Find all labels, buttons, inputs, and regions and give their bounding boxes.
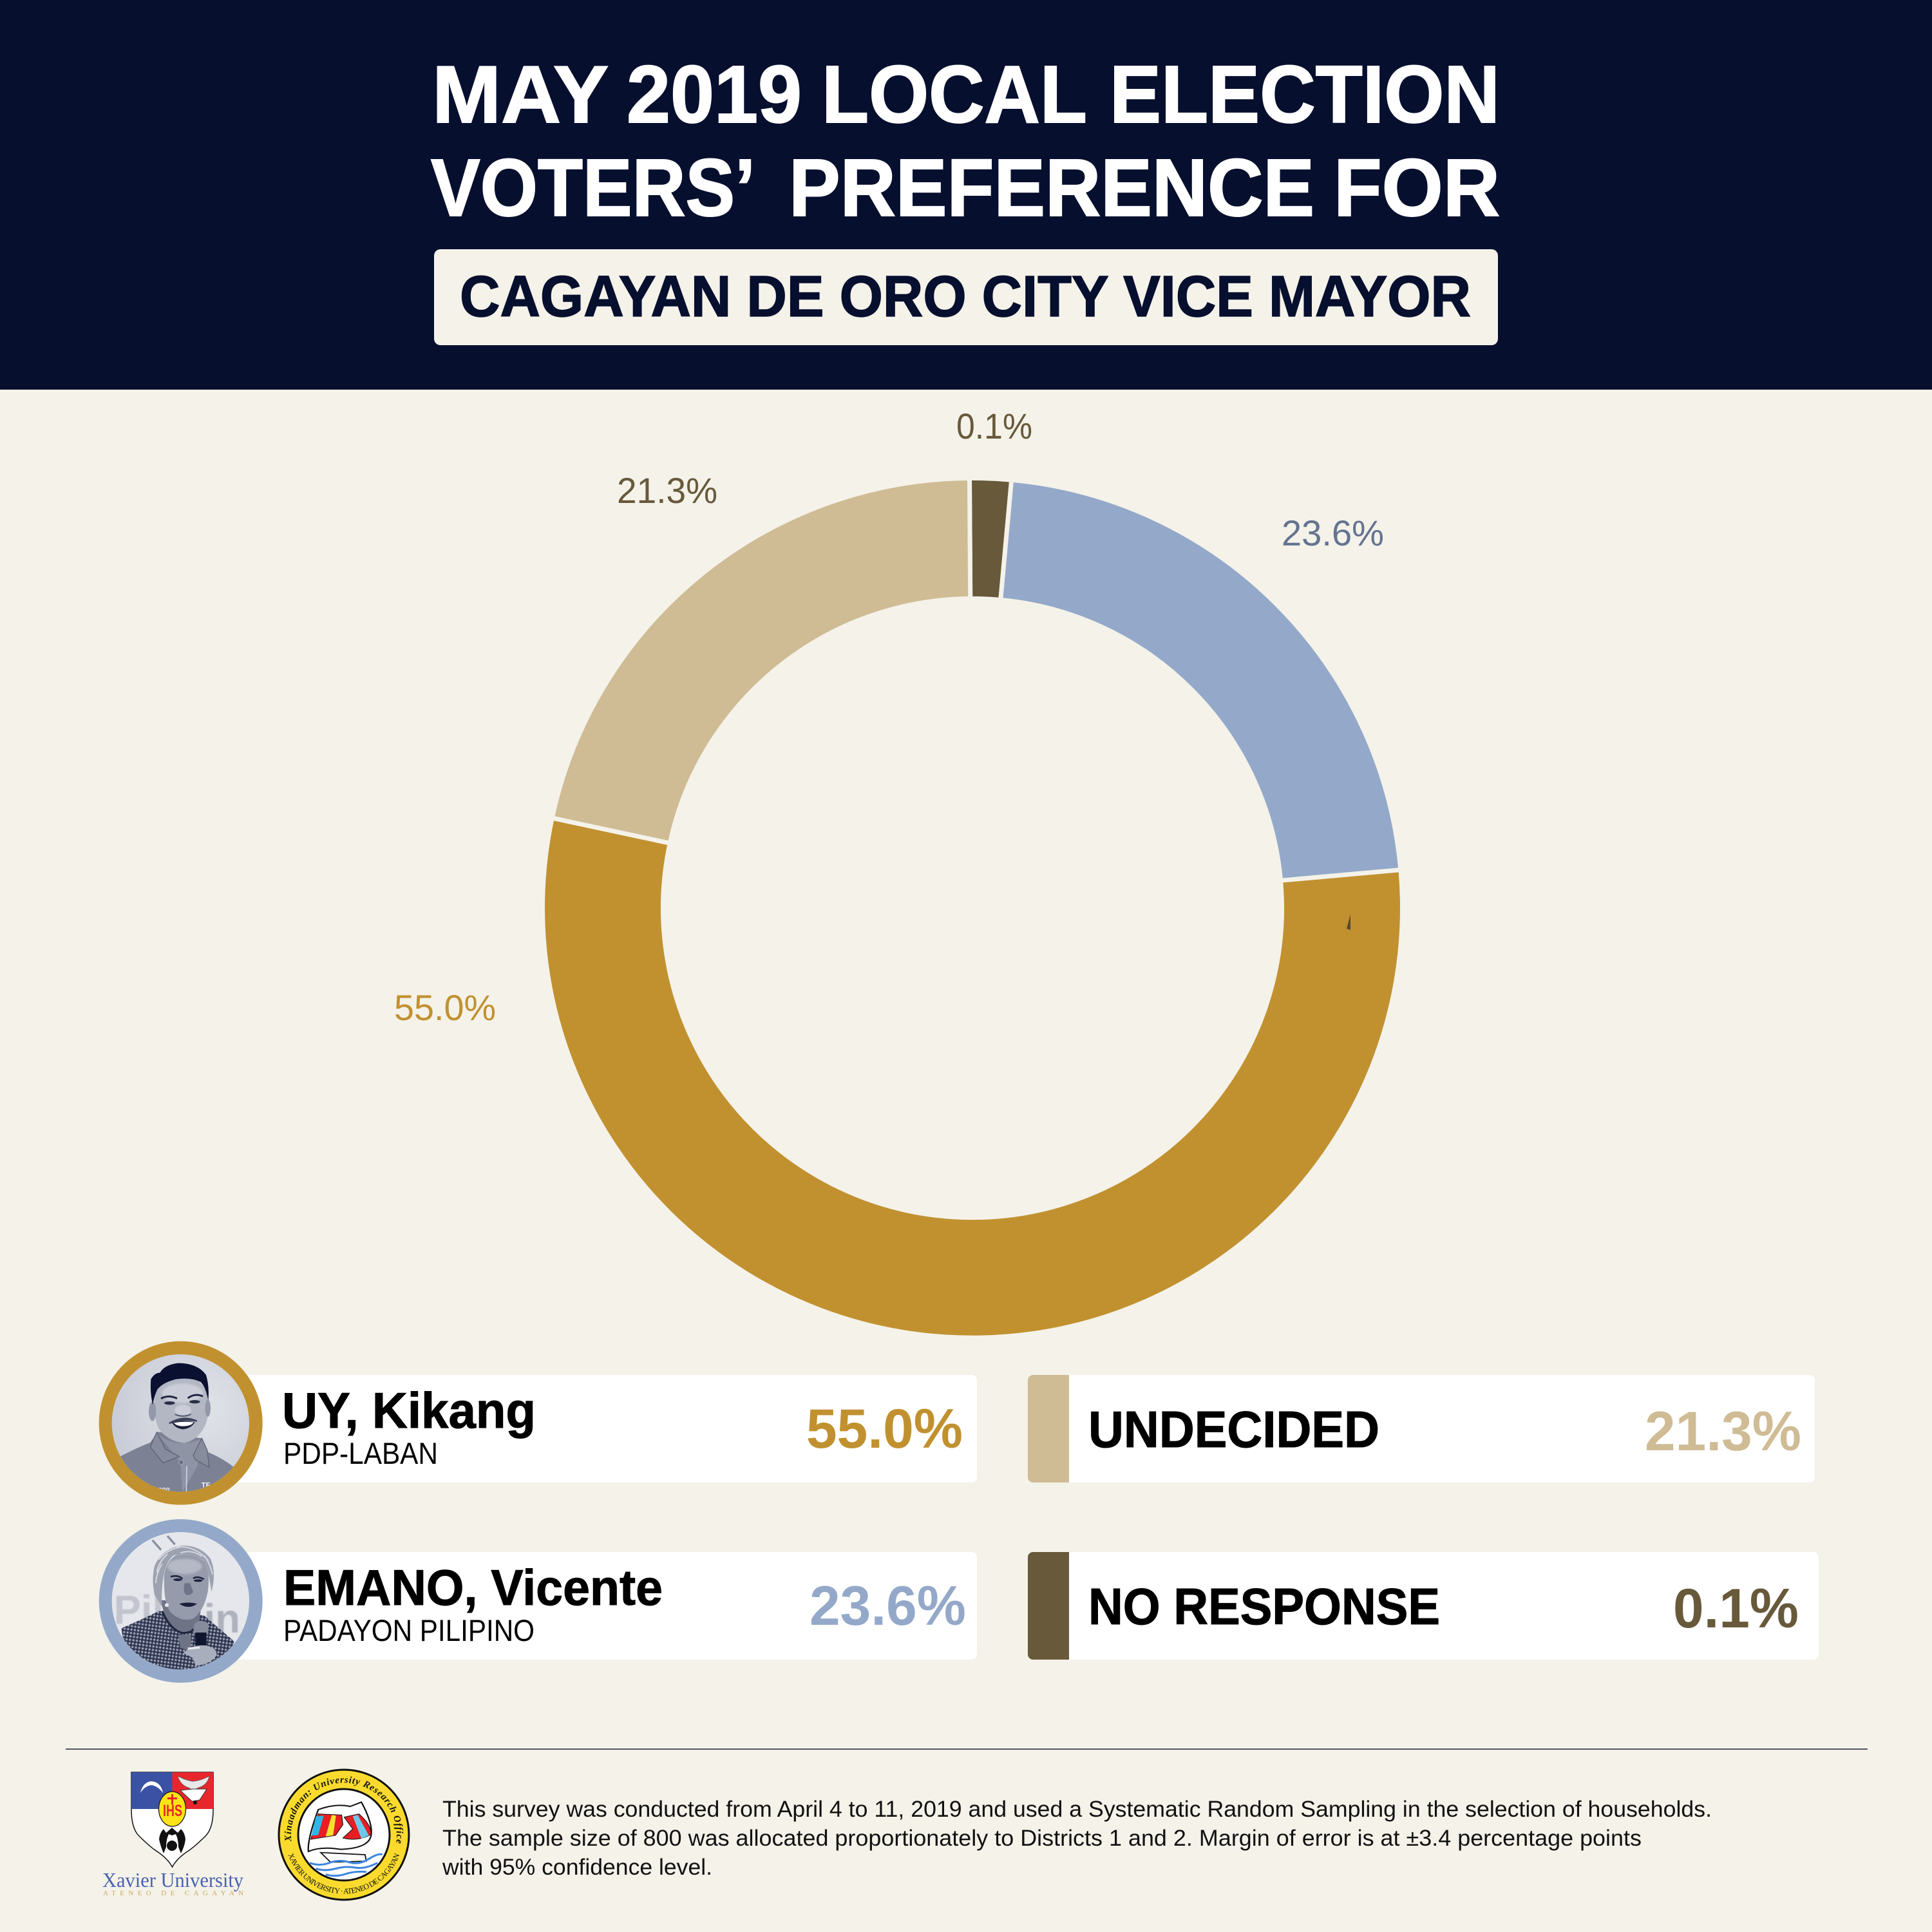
title line 2 [431,142,1500,233]
slice: no response 0.1% [970,478,1012,600]
subtitle box [434,249,1498,345]
logo: Xavier University: IHS [163,1802,182,1820]
logo: Kinaadman University Research Office: Xinaadman: University Research Office [285,1776,403,1844]
percentage: 55.0% [806,1398,963,1460]
legend card: no response [1028,1552,1819,1660]
swatch [1028,1552,1069,1660]
percentage: 21.3% [1645,1401,1801,1463]
slice: undecided 21.3% [552,478,971,843]
header band [0,0,1932,390]
title line 2: FOR [1334,142,1500,233]
donut chart [543,478,1403,1338]
title line 1: MAY [432,49,609,140]
subtitle box: CAGAYAN DE ORO CITY VICE MAYOR [460,265,1471,329]
legend card: Emano [213,1552,977,1660]
wordmark: Xavier University [102,1868,243,1891]
name: EMANO, Vicente [283,1559,663,1616]
label: NO RESPONSE [1088,1578,1440,1635]
title line 2: VOTERS’ [431,142,755,233]
portrait: Emano [99,1519,263,1683]
portrait: Uy: TF [202,1481,211,1489]
tagline: ATENEO DE CAGAYAN [103,1889,243,1897]
portrait: Uy: ang [158,1486,170,1493]
logo: Kinaadman University Research Office [278,1768,410,1901]
title line 1: 2019 [627,49,802,140]
chart label 0.1%: 0.1% [956,406,1032,446]
chart artefact mark [1347,914,1350,930]
slice: Uy 55.0% [543,818,1403,1338]
legend card: Uy [213,1375,977,1482]
title line 1 [432,49,1500,140]
legend card: undecided [1028,1375,1815,1482]
logo: Xavier University [102,1772,243,1897]
percentage: 0.1% [1673,1578,1799,1640]
title line 1: LOCAL [822,49,1087,140]
methodology note: This survey was conducted from April 4 to 11, 2019 and used a Systematic Random Sampling in the selection of households. [442,1797,1712,1822]
title line 2: PREFERENCE [789,142,1314,233]
chart label 23.6%: 23.6% [1282,513,1384,553]
portrait: Emano: Pil [114,1588,164,1633]
label: UNDECIDED [1088,1401,1379,1458]
title line 1: ELECTION [1110,49,1500,140]
portrait: Emano: in [204,1596,240,1642]
methodology note [442,1797,1712,1880]
portrait: Uy [99,1341,263,1505]
methodology note: The sample size of 800 was allocated proportionately to Districts 1 and 2. Margin of error is at ±3.4 percentage points [442,1826,1642,1851]
chart label 21.3%: 21.3% [617,470,717,511]
logo: Kinaadman University Research Office: XAVIER UNIVERSITY · ATENEO DE CAGAYAN [289,1853,399,1894]
methodology note: with 95% confidence level. [442,1855,712,1880]
chart label 55.0%: 55.0% [394,987,496,1028]
swatch [1028,1375,1069,1482]
party: PADAYON PILIPINO [283,1613,535,1647]
slice: Emano 23.6% [1001,480,1401,880]
percentage: 23.6% [810,1575,966,1637]
name: UY, Kikang [282,1382,536,1439]
party: PDP-LABAN [283,1436,438,1470]
